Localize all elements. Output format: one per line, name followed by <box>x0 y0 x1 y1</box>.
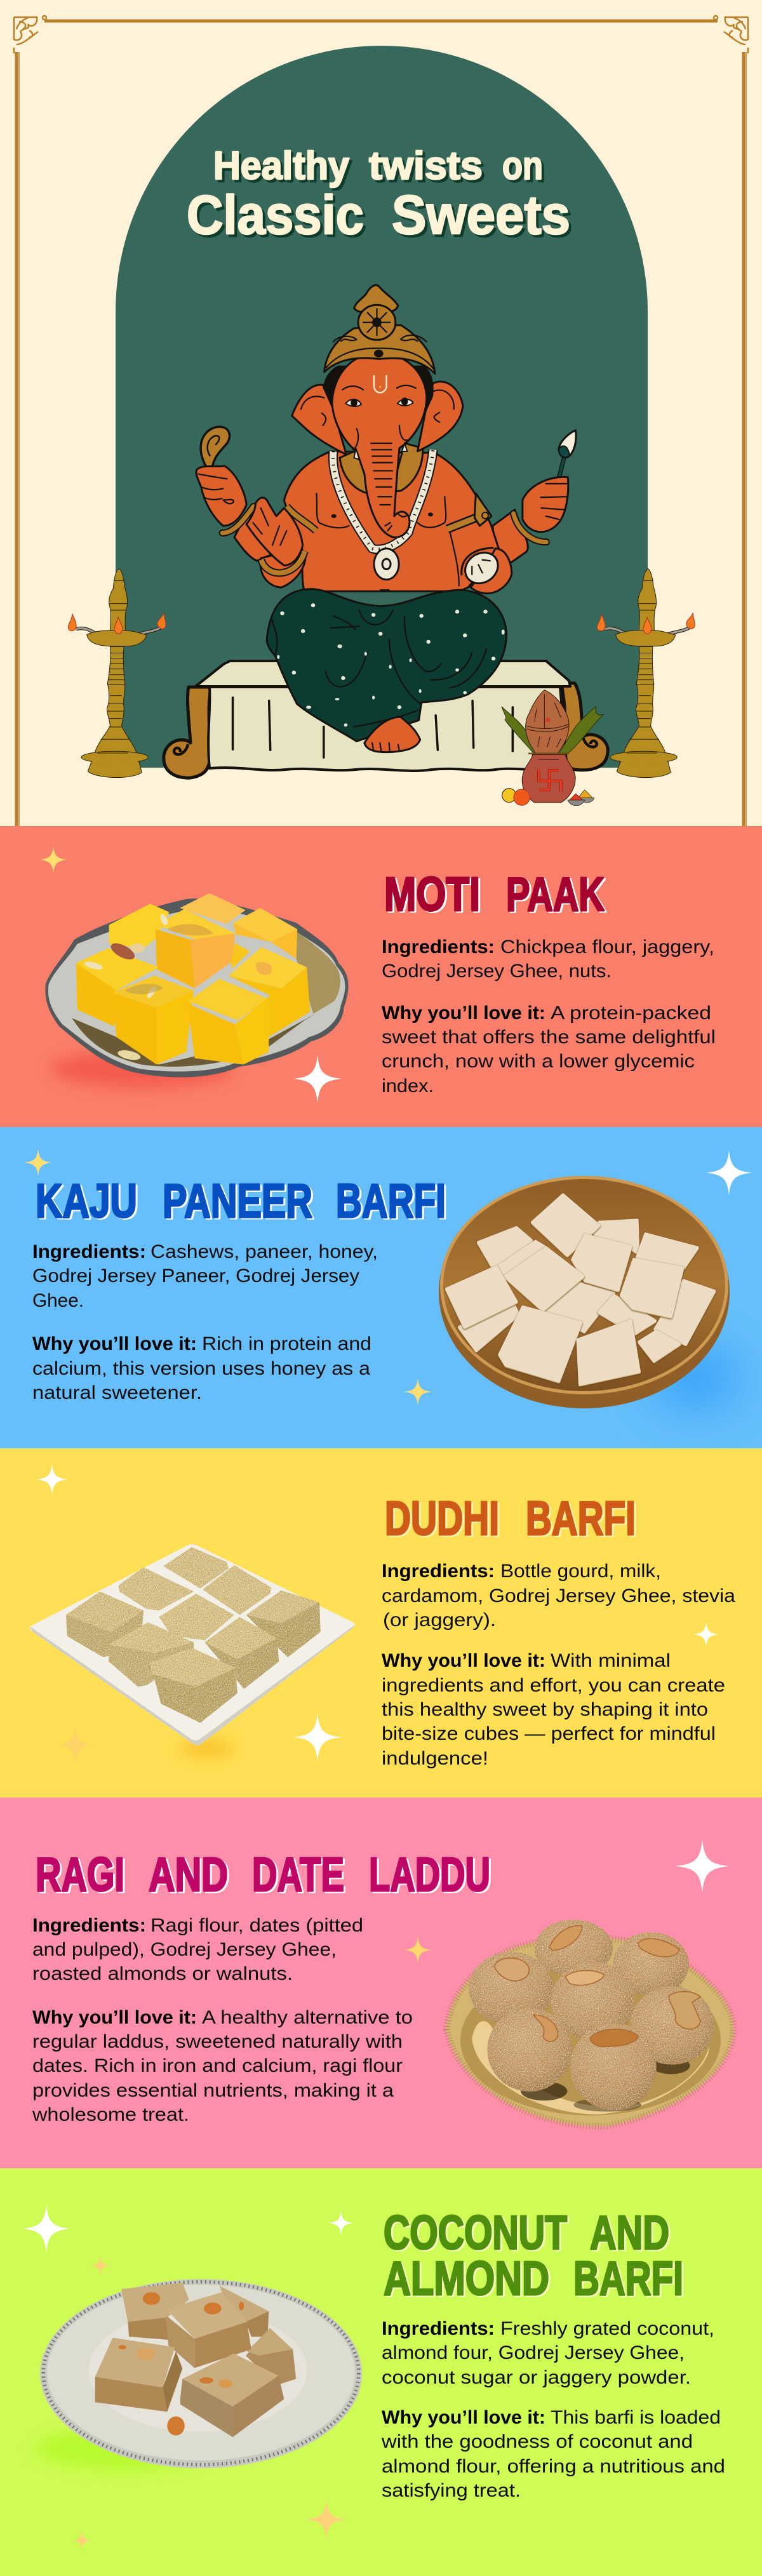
ingredients: Ingredients: <box>382 937 495 958</box>
heading: AND <box>590 2206 669 2259</box>
section: coconut and almond barfi <box>0 2168 762 2576</box>
tilak <box>374 375 387 392</box>
why you'll love it: with the goodness of coconut and <box>381 2431 693 2452</box>
nipples <box>331 512 433 518</box>
heading <box>384 2206 683 2305</box>
why you'll love it: A protein-packed <box>551 1003 711 1024</box>
foot <box>364 717 420 752</box>
raised palm bangle <box>261 551 305 573</box>
why you'll love it <box>381 2407 725 2501</box>
sparkle <box>676 1839 729 1893</box>
ingredients: Ghee. <box>32 1290 84 1311</box>
sparkle <box>22 2205 70 2253</box>
coconut <box>526 690 569 753</box>
modak hand <box>462 548 512 594</box>
marigolds <box>502 789 530 805</box>
sparkle <box>36 1464 68 1495</box>
heading: AND <box>149 1848 228 1901</box>
title: twists <box>369 144 483 188</box>
moti paak photo <box>45 893 349 1088</box>
ingredients: Godrej Jersey Ghee, nuts. <box>382 961 612 982</box>
sparkle <box>328 2210 354 2236</box>
sparkle <box>293 1055 342 1103</box>
heading: LADDU <box>369 1848 490 1901</box>
sparkle <box>24 1149 52 1177</box>
collar <box>340 443 423 493</box>
decorative frame <box>14 16 748 826</box>
arch <box>116 46 648 768</box>
heading: COCONUT <box>384 2206 567 2259</box>
trunk lines <box>353 425 407 531</box>
ingredients: Ingredients: <box>382 2318 495 2339</box>
sparkle <box>90 2255 110 2276</box>
torso and right arm <box>284 451 499 591</box>
hand left <box>196 466 246 526</box>
ingredients <box>382 2318 714 2388</box>
title: Classic <box>187 185 364 246</box>
heading <box>384 867 605 921</box>
why you'll love it: index. <box>382 1076 434 1097</box>
ganesha <box>196 285 576 757</box>
title: on <box>502 144 543 188</box>
lamp right <box>597 569 695 778</box>
sparkle <box>693 1622 719 1647</box>
sparkle <box>72 2530 92 2551</box>
why you'll love it: Why you’ll love it: <box>382 1650 545 1671</box>
sparkle <box>293 1713 342 1761</box>
pot symbol <box>538 770 561 792</box>
title: Sweets <box>392 185 570 246</box>
coconut barfi photo <box>36 2279 362 2470</box>
seat <box>164 661 608 778</box>
ingredients: Ragi flour, dates (pitted <box>150 1915 363 1936</box>
sparkle <box>306 2499 347 2540</box>
why you'll love it: satisfying treat. <box>382 2480 521 2501</box>
why you'll love it: natural sweetener. <box>32 1382 202 1403</box>
section: ragi and date laddu <box>0 1798 762 2168</box>
why you'll love it: ingredients and effort, you can create <box>382 1675 725 1696</box>
pendant <box>374 549 399 580</box>
header panel background <box>0 0 762 826</box>
sparkle <box>706 1150 752 1196</box>
why you'll love it: dates. Rich in iron and calcium, ragi flour <box>32 2055 403 2076</box>
heading: DUDHI <box>385 1492 499 1545</box>
why you'll love it: Why you’ll love it: <box>32 1333 197 1354</box>
sparkle <box>404 1936 432 1964</box>
corner ornament right <box>714 16 748 53</box>
laddu photo <box>446 1919 733 2126</box>
kalash and coconut <box>502 690 603 806</box>
dudhi barfi photo <box>30 1544 356 1758</box>
ear right <box>418 382 463 451</box>
kumkum bowls <box>568 790 594 806</box>
almonds <box>119 2292 244 2436</box>
kaju barfi photo <box>439 1176 740 1408</box>
ingredients: Ingredients: <box>32 1915 146 1936</box>
heading <box>36 1848 490 1901</box>
flower bud <box>552 430 576 521</box>
ingredients <box>382 1561 735 1631</box>
why you'll love it: indulgence! <box>382 1748 488 1769</box>
face and trunk <box>332 352 427 537</box>
why you'll love it: Why you’ll love it: <box>382 1003 545 1024</box>
hair <box>323 366 434 411</box>
why you'll love it: wholesome treat. <box>32 2104 189 2125</box>
raised palm forearm <box>260 552 305 587</box>
ingredients <box>32 1915 363 1984</box>
necklace <box>333 450 433 549</box>
heading: PAAK <box>506 867 605 921</box>
sparkle <box>57 1726 95 1764</box>
leaves <box>502 707 603 753</box>
heading: BARFI <box>336 1174 446 1227</box>
title <box>187 144 570 246</box>
ingredients: Freshly grated coconut, <box>500 2318 714 2339</box>
heading: BARFI <box>573 2252 683 2305</box>
ear left <box>292 385 346 455</box>
why you'll love it: Rich in protein and <box>202 1333 371 1354</box>
pot <box>522 754 575 803</box>
hand right <box>523 477 568 532</box>
arm: outer right <box>493 510 528 565</box>
lamp left <box>68 569 166 778</box>
ingredients: and pulped), Godrej Jersey Ghee, <box>32 1939 337 1960</box>
heading <box>385 1492 636 1545</box>
torso lines <box>316 493 459 586</box>
why you'll love it <box>32 2007 413 2125</box>
ingredients: roasted almonds or walnuts. <box>32 1963 293 1984</box>
why you'll love it <box>382 1003 716 1097</box>
heading: MOTI <box>384 867 480 921</box>
heading: BARFI <box>526 1492 636 1545</box>
why you'll love it: With minimal <box>551 1650 671 1671</box>
corner ornament left <box>14 16 46 53</box>
tusks <box>354 443 407 460</box>
heading: RAGI <box>36 1848 124 1901</box>
why you'll love it: sweet that offers the same delightful <box>382 1027 716 1048</box>
heading: KAJU <box>36 1174 137 1227</box>
why you'll love it: calcium, this version uses honey as a <box>32 1358 370 1379</box>
heading: DATE <box>252 1848 344 1901</box>
sparkle <box>404 1378 432 1406</box>
why you'll love it: crunch, now with a lower glycemic <box>382 1051 695 1072</box>
heading: ALMOND <box>384 2252 549 2305</box>
section: kaju paneer barfi <box>0 1127 762 1448</box>
why you'll love it: This barfi is loaded <box>551 2407 721 2428</box>
why you'll love it: this healthy sweet by shaping it into <box>382 1699 708 1720</box>
ingredients: almond four, Godrej Jersey Ghee, <box>382 2342 685 2363</box>
why you'll love it <box>32 1333 371 1403</box>
heading: PANEER <box>163 1174 312 1227</box>
bangle left <box>222 507 253 533</box>
ingredients: cardamom, Godrej Jersey Ghee, stevia <box>382 1585 735 1606</box>
belly button <box>380 589 389 591</box>
why you'll love it <box>382 1650 725 1769</box>
crown <box>324 285 435 373</box>
arm: outer left <box>234 516 274 561</box>
dhoti <box>267 589 507 741</box>
ingredients: Godrej Jersey Paneer, Godrej Jersey <box>32 1265 359 1286</box>
why you'll love it: regular laddus, sweetened naturally with <box>32 2031 403 2052</box>
ingredients <box>382 937 714 982</box>
heading <box>36 1174 446 1227</box>
ingredients: Bottle gourd, milk, <box>500 1561 661 1582</box>
goad <box>201 427 230 474</box>
bangle right <box>514 514 546 542</box>
why you'll love it: Why you’ll love it: <box>32 2007 197 2028</box>
why you'll love it: bite-size cubes — perfect for mindful <box>382 1723 716 1744</box>
title: Healthy <box>213 144 349 188</box>
ingredients: Ingredients: <box>382 1561 495 1582</box>
section: moti paak <box>0 826 762 1127</box>
raised palm <box>246 498 303 565</box>
why you'll love it: Why you’ll love it: <box>382 2407 545 2428</box>
armband right <box>447 493 491 529</box>
eyes <box>342 385 416 407</box>
armband left <box>286 507 316 531</box>
ingredients: (or jaggery). <box>383 1610 496 1631</box>
why you'll love it: almond flour, offering a nutritious and <box>382 2456 725 2477</box>
why you'll love it: provides essential nutrients, making it a <box>32 2080 394 2101</box>
ingredients: coconut sugar or jaggery powder. <box>382 2367 691 2388</box>
sparkle <box>39 846 67 874</box>
ingredients: Cashews, paneer, honey, <box>150 1241 378 1262</box>
ingredients <box>32 1241 378 1311</box>
why you'll love it: A healthy alternative to <box>202 2007 413 2028</box>
seat pleats <box>233 698 512 757</box>
section: dudhi barfi <box>0 1448 762 1798</box>
cashews <box>494 1926 700 2046</box>
ingredients: Chickpea flour, jaggery, <box>500 937 714 958</box>
ingredients: Ingredients: <box>32 1241 146 1262</box>
